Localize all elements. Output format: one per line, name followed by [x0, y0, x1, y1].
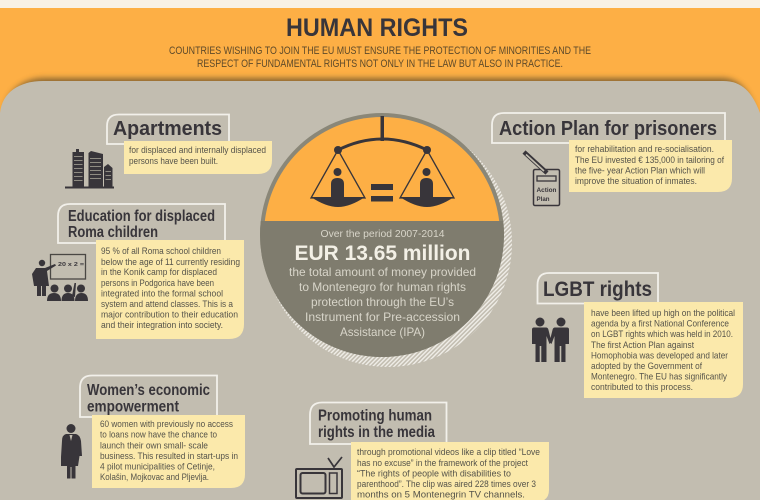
text: action plan: [569, 140, 732, 192]
text: action plan: the five- year Action Plan which will: [575, 166, 705, 176]
heading: women's empowerment: empowerment: [87, 398, 179, 416]
panel: apartments: [65, 114, 272, 188]
text: action plan: for rehabilitation and re-socialisation.: [575, 144, 714, 155]
text: media: through promotional videos like a clip titled “Love: [357, 447, 540, 458]
heading: media: rights in the media: [318, 424, 435, 441]
subtitle: [169, 45, 591, 70]
text: LGBT rights: Homophobia was developed and later: [591, 350, 729, 362]
text: education: persons in Podgorica have been: [101, 278, 214, 289]
text: education: in the Konik camp for displaced: [101, 267, 217, 278]
text: LGBT rights: on LGBT rights which was held in 2010.: [591, 329, 733, 340]
circle text: EUR 13.65 million: [294, 242, 470, 265]
heading: women's empowerment: Women’s economic: [87, 382, 210, 399]
text: women's empowerment: Kolašin, Mojkovac and Pljevlja.: [100, 472, 209, 483]
panel: education for displaced Roma children: [32, 204, 244, 339]
text: education: major contribution to their education: [101, 310, 238, 320]
heading: action plan: [492, 113, 725, 143]
heading: media: Promoting human: [318, 408, 432, 424]
text: education: [96, 240, 244, 339]
heading: apartments: Apartments: [113, 118, 222, 140]
text: LGBT rights: contributed to this process.: [591, 382, 693, 393]
heading: women's empowerment: [80, 376, 217, 417]
text: women's empowerment: 4 pilot municipalities of Cetinje,: [100, 462, 215, 472]
icon: balance scales: [311, 116, 454, 207]
text: LGBT rights: agenda by a first National Conference: [591, 318, 729, 330]
text: media: has no excuse” in the framework of the project: [357, 458, 528, 469]
text: media: [351, 442, 549, 500]
text: LGBT rights: have been lifted up high on the political: [591, 308, 735, 319]
panel: promoting human rights in the media: [296, 402, 549, 500]
text: apartments: [124, 141, 272, 174]
text: media: “The rights of people with disabilities to: [357, 468, 511, 480]
panel: action plan for prisoners: [492, 113, 732, 206]
text: women's empowerment: 60 women with previously no access: [100, 419, 233, 430]
heading: education: Roma children: [68, 224, 158, 241]
text: women's empowerment: [92, 415, 245, 488]
text: apartments: persons have been built.: [129, 156, 218, 167]
circle text: to Montenegro for human rights: [299, 280, 466, 294]
text: LGBT rights: The first Action Plan against: [591, 340, 694, 351]
heading: education: Education for displaced: [68, 208, 215, 225]
icon: action plan document and pen: Plan: [536, 196, 550, 203]
text: education: below the age of 11 currently residing: [101, 257, 240, 268]
circle text: [289, 228, 476, 339]
top cream strip: [0, 0, 760, 8]
text: action plan: The EU invested € 135,000 in tailoring of: [575, 155, 724, 166]
circle text: protection through the EU’s: [311, 295, 454, 309]
panel: LGBT rights: [532, 273, 743, 398]
text: women's empowerment: to loans now have the chance to: [100, 430, 217, 440]
icon: action plan document and pen: [524, 152, 560, 206]
central circle: [260, 113, 504, 357]
text: LGBT rights: adopted by the Government of: [591, 361, 702, 372]
title: HUMAN RIGHTS: [286, 14, 468, 42]
icon: two men holding hands: [532, 318, 569, 362]
circle text: Assistance (IPA): [340, 325, 425, 339]
panel: women's economic empowerment: [61, 376, 245, 488]
heading: action plan: Action Plan for prisoners: [499, 118, 717, 140]
heading: media: [310, 402, 446, 444]
circle text: Instrument for Pre-accession: [305, 310, 460, 324]
subtitle: COUNTRIES WISHING TO JOIN THE EU MUST ENSURE THE PROTECTION OF MINORITIES AND THE: [169, 45, 591, 57]
text: education: integrated into the formal school: [101, 288, 223, 300]
icon: businesswoman: [61, 424, 82, 478]
text: education: and their integration into society.: [101, 320, 223, 331]
text: apartments: for displaced and internally displaced: [129, 145, 266, 156]
heading: LGBT rights: LGBT rights: [543, 278, 652, 301]
icon: teacher and pupils: [32, 254, 88, 301]
heading: apartments: [107, 114, 229, 144]
text: action plan: improve the situation of inmates.: [575, 176, 697, 187]
circle text: Over the period 2007-2014: [320, 228, 445, 240]
hatched circle shadow: [264, 119, 512, 367]
text: LGBT rights: Montenegro. The EU has significantly: [591, 372, 727, 382]
text: education: system and attend classes. This is a: [101, 299, 234, 310]
circle text: the total amount of money provided: [289, 265, 476, 279]
icon: television: [296, 457, 342, 498]
icon: teacher and pupils: 20 x 2 =: [58, 262, 84, 268]
heading: LGBT rights: [538, 273, 658, 304]
subtitle: RESPECT OF FUNDAMENTAL RIGHTS NOT ONLY IN THE LAW BUT ALSO IN PRACTICE.: [197, 58, 563, 70]
icon: action plan document and pen: Action: [536, 187, 557, 194]
text: women's empowerment: business. This resulted in start-ups in: [100, 451, 238, 462]
icon: apartment buildings: [65, 149, 114, 188]
text: women's empowerment: launch their own small- scale: [100, 440, 208, 452]
text: LGBT rights: [584, 302, 743, 398]
heading: education: [58, 204, 225, 243]
text: education: 95 % of all Roma school children: [101, 246, 221, 257]
text: media: parenthood”. The clip was aired 228 times over 3: [357, 479, 536, 490]
